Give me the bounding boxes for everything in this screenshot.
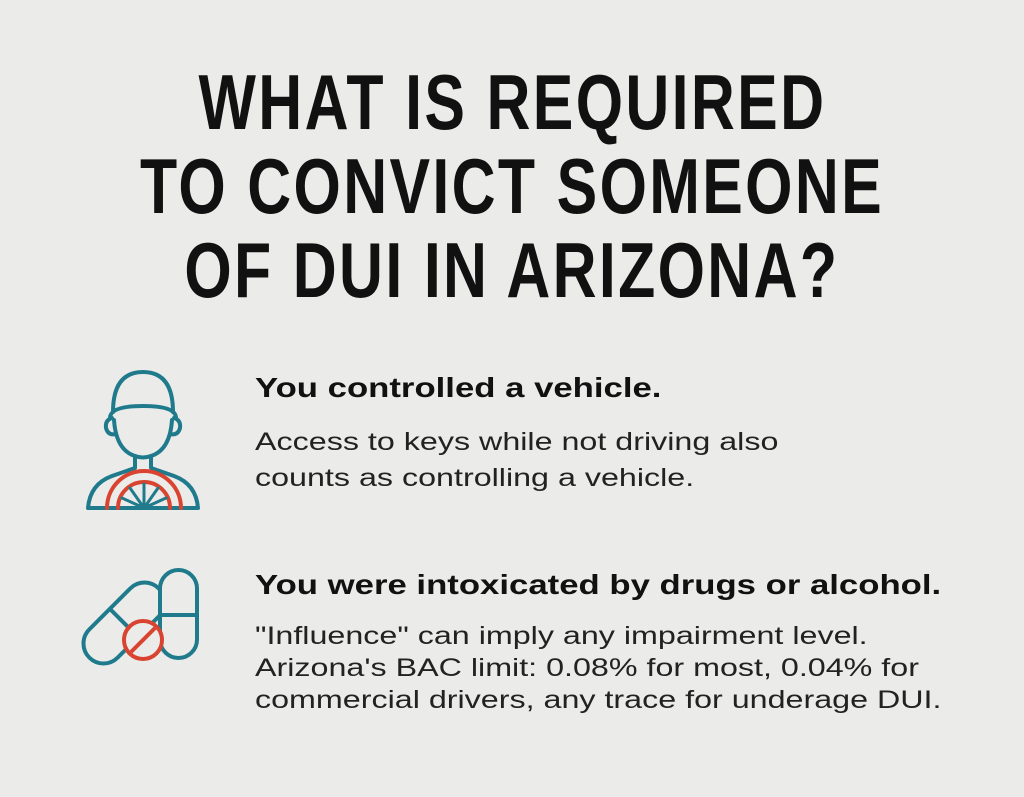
body 2: [255, 622, 941, 714]
body 1: counts as controlling a vehicle.: [255, 464, 694, 492]
title: [140, 58, 884, 314]
title: OF DUI IN ARIZONA?: [185, 226, 839, 314]
heading 1: You controlled a vehicle.: [255, 372, 661, 403]
body 2: "Influence" can imply any impairment level.: [255, 622, 868, 650]
body 1: [255, 428, 778, 492]
body 2: commercial drivers, any trace for underage DUI.: [255, 686, 941, 714]
title: TO CONVICT SOMEONE: [140, 142, 884, 230]
title: WHAT IS REQUIRED: [198, 58, 826, 146]
heading 2: You were intoxicated by drugs or alcohol.: [255, 569, 941, 600]
body 1: Access to keys while not driving also: [255, 428, 778, 456]
icon: driver: [86, 370, 200, 510]
icon: pills: [82, 568, 199, 666]
body 2: Arizona's BAC limit: 0.08% for most, 0.04% for: [255, 654, 919, 682]
